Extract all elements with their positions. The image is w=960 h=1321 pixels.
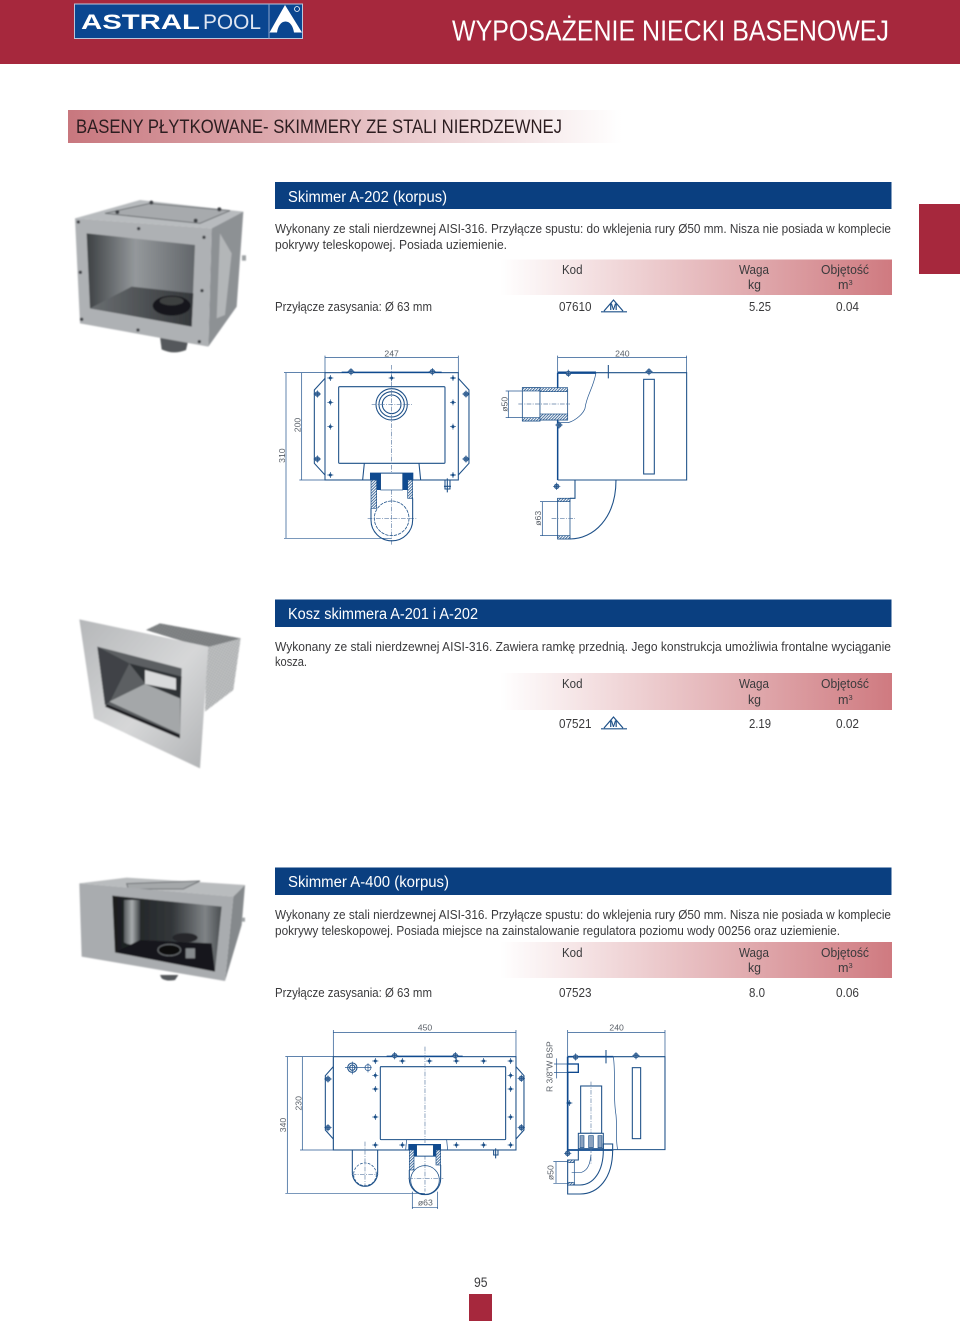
description: Skimmer A-202 (275, 221, 891, 252)
table: Skimmer A-400: Objętość (821, 945, 870, 960)
technical drawing: A-400 front view: 230 (293, 1096, 303, 1111)
logo: AstralPool (74, 4, 302, 38)
table: Kosz skimmera: 2.19 (749, 716, 771, 731)
description: Skimmer A-202: Wykonany ze stali nierdzewnej AISI-316. Przyłącze spustu: do wklejenia rury Ø50 mm. Nisza nie posiada w komplecie (275, 221, 891, 236)
table: Skimmer A-202: Przyłącze zasysania: Ø 63 mm (275, 299, 432, 314)
description: Kosz skimmera: Wykonany ze stali nierdzewnej AISI-316. Zawiera ramkę przednią. Jego konstrukcja umożliwia frontalne wyciąganie (275, 639, 891, 654)
technical drawing: A-202 side view: 240 (615, 349, 630, 359)
technical drawing: A-202 side view: ø50 (499, 397, 509, 412)
product bar: Kosz skimmera: Kosz skimmera A-201 i A-202 (288, 606, 478, 623)
technical drawing: A-400 side view (545, 1022, 665, 1194)
table: Kosz skimmera: Objętość (821, 676, 870, 691)
description: Kosz skimmera: kosza. (275, 654, 307, 669)
logo: AstralPool: ASTRAL (81, 11, 200, 34)
table: Skimmer A-400: Waga (739, 945, 770, 960)
product bar: Skimmer A-202 (275, 182, 892, 209)
page title: WYPOSAŻENIE NIECKI BASENOWEJ (452, 14, 889, 48)
technical drawing: A-400 side view: R 3/8"W BSP (545, 1041, 555, 1092)
table: Skimmer A-400: 8.0 (749, 985, 765, 1000)
table: Skimmer A-400: Przyłącze zasysania: Ø 63 mm (275, 985, 432, 1000)
table: Kosz skimmera: 3 (848, 693, 853, 702)
technical drawing: A-202 side view (499, 349, 687, 539)
page number: 95 (474, 1275, 488, 1290)
photo: skimmer A-400 (79, 878, 245, 981)
technical drawing: A-400 side view: ø50 (546, 1165, 556, 1180)
table: Kosz skimmera: kg (748, 692, 761, 707)
section heading band (68, 110, 622, 143)
photo: skimmer A-202 (75, 200, 246, 352)
icon: M mark (601, 300, 627, 313)
table: Kosz skimmera (500, 673, 892, 731)
table: Skimmer A-400: 07523 (559, 985, 592, 1000)
section heading band: BASENY PŁYTKOWANE- SKIMMERY ZE STALI NIERDZEWNEJ (76, 117, 562, 138)
technical drawing: A-202 front view: 247 (384, 349, 399, 359)
product bar: Skimmer A-202: Skimmer A-202 (korpus) (288, 189, 447, 206)
description: Skimmer A-202: pokrywy teleskopowej. Posiada uziemienie. (275, 237, 507, 252)
technical drawing: A-400 front view: 340 (278, 1118, 288, 1132)
table: Kosz skimmera: 07521 (559, 716, 592, 731)
technical drawing: A-400 front view: 450 (418, 1022, 432, 1032)
page marker (469, 1294, 492, 1321)
photo: skimmer basket (79, 619, 241, 768)
side tab (919, 204, 960, 274)
table: Skimmer A-202: Kod (562, 262, 582, 277)
table: Skimmer A-202: 3 (848, 278, 853, 287)
logo: AstralPool: POOL (203, 11, 261, 34)
technical drawing: A-202 front view: 200 (293, 418, 303, 432)
table: Skimmer A-202: Objętość (821, 262, 870, 277)
description: Skimmer A-400: Wykonany ze stali nierdzewnej AISI-316. Przyłącze spustu: do wklejenia rury Ø50 mm. Nisza nie posiada w komplecie (275, 907, 891, 922)
technical drawing: A-400 front view: ø63 (418, 1198, 433, 1208)
table: Skimmer A-400: m (838, 960, 848, 975)
technical drawing: A-202 front view (277, 349, 470, 545)
icon: M mark (601, 717, 627, 730)
header band (0, 0, 960, 64)
product bar: Skimmer A-400 (275, 868, 892, 895)
table: Skimmer A-202: 5.25 (749, 299, 771, 314)
table: Skimmer A-202: 0.04 (836, 299, 859, 314)
technical drawing: A-202 side view: ø63 (533, 511, 543, 526)
description: Skimmer A-400: pokrywy teleskopowej. Posiada miejsce na zainstalowanie regulatora poziomu wody 00256 oraz uziemienie. (275, 923, 840, 938)
table: Skimmer A-202: Waga (739, 262, 770, 277)
technical drawing: A-400 front view (278, 1022, 525, 1209)
table: Skimmer A-400: kg (748, 960, 761, 975)
table: Skimmer A-202: kg (748, 277, 761, 292)
table: Kosz skimmera: Kod (562, 676, 582, 691)
description: Kosz skimmera (275, 639, 891, 669)
description: Skimmer A-400 (275, 907, 891, 938)
technical drawing: A-400 side view: 240 (609, 1022, 624, 1032)
table: Skimmer A-400: Kod (562, 945, 582, 960)
table: Skimmer A-400: 3 (848, 961, 853, 970)
table: Kosz skimmera: m (838, 692, 848, 707)
table: Skimmer A-202: 07610 (559, 299, 592, 314)
technical drawing: A-202 front view: 310 (277, 448, 287, 463)
product bar: Skimmer A-400: Skimmer A-400 (korpus) (288, 874, 449, 891)
table: Skimmer A-400 (275, 942, 892, 1000)
icon: M mark: M (610, 719, 618, 730)
table: Skimmer A-202 (275, 260, 892, 314)
table: Kosz skimmera: Waga (739, 676, 770, 691)
table: Kosz skimmera: 0.02 (836, 716, 859, 731)
product bar: Kosz skimmera (275, 600, 892, 627)
icon: M mark: M (610, 302, 618, 313)
table: Skimmer A-202: m (838, 277, 848, 292)
table: Skimmer A-400: 0.06 (836, 985, 859, 1000)
